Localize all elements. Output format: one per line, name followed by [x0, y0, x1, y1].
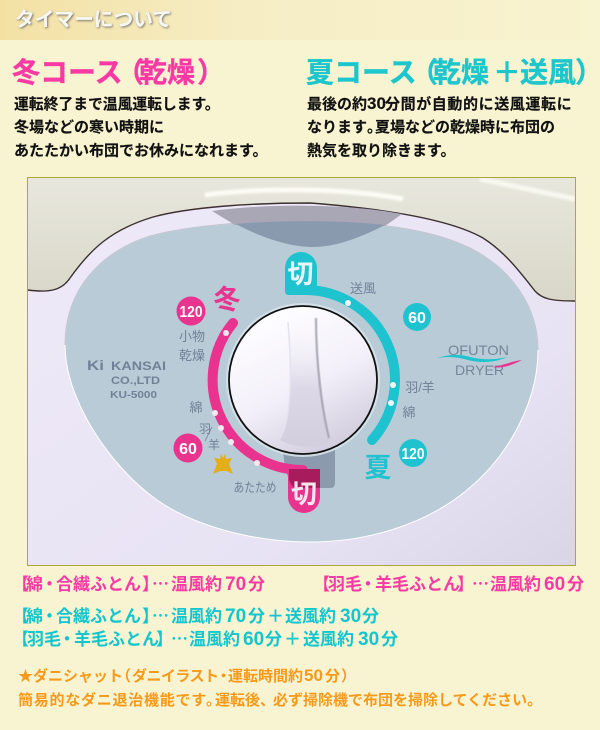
season kanji: summer: 夏: [364, 453, 392, 483]
dial labels: 綿: [402, 405, 416, 420]
winter course times: 】: [142, 575, 159, 594]
dial labels: [179, 281, 435, 495]
badge: pink 60: [174, 434, 202, 462]
badge: cyan 120: [399, 439, 427, 467]
summer course times: ⋯: [152, 607, 169, 626]
winter course text: 運転終了まで温風運転します。: [14, 95, 220, 113]
icon: mite: [213, 454, 233, 474]
winter course times: [12, 574, 584, 595]
heading: winter course: 冬コース: [12, 57, 123, 88]
summer course times: 温風約: [171, 607, 222, 626]
winter course times: 温風約: [171, 575, 222, 594]
beige upper housing: [28, 178, 575, 301]
winter course times: 【: [12, 575, 29, 594]
dial labels: 送風: [350, 281, 376, 296]
winter course times: 70: [225, 574, 246, 595]
summer course times: ＋: [267, 607, 284, 626]
summer course times: 60: [243, 629, 264, 650]
season kanji: winter: 冬: [214, 285, 240, 315]
summer course text: 最後の約: [307, 95, 367, 113]
summer course times: 】: [156, 630, 173, 649]
cyan tab label: 切: [287, 259, 314, 289]
summer course times: 30: [340, 606, 361, 627]
product logo: [437, 342, 522, 378]
winter course times: 60: [544, 574, 565, 595]
dial knob: [226, 303, 380, 457]
summer course times: 30: [358, 629, 379, 650]
mite course note: ダニイラスト: [132, 667, 219, 685]
winter course text: [14, 95, 268, 160]
mite course note: ★: [18, 668, 33, 685]
summer course times: ⋯: [171, 630, 188, 649]
pink winter arc: [212, 323, 320, 513]
winter course times: 羽毛: [328, 575, 362, 594]
summer course times: 分: [265, 630, 282, 649]
winter course times: ・: [360, 575, 376, 594]
summer course times: 送風約: [285, 607, 336, 626]
summer course times: 送風約: [303, 630, 354, 649]
summer course text: 分間が自動的に送風運転に: [385, 95, 572, 113]
winter course times: ⋯: [472, 575, 489, 594]
badge: pink 120: [176, 296, 206, 326]
summer course text: [307, 94, 572, 160]
dial labels: あたため: [234, 480, 276, 495]
badge: pink 120: 120: [180, 304, 203, 321]
tab shaded part: [289, 469, 320, 488]
product logo: OFUTON: [448, 342, 509, 358]
winter course times: 温風約: [490, 575, 541, 594]
winter course times: 羊毛ふとん: [375, 574, 460, 594]
product logo: DRYER: [455, 362, 504, 378]
panel: summer course description: [306, 57, 600, 160]
summer course times: 分: [248, 607, 265, 626]
dial labels: 綿: [189, 400, 203, 415]
grey oval control plate: [65, 221, 538, 542]
heading: summer course: 送風: [520, 57, 576, 88]
dial labels: 小物: [179, 329, 205, 344]
summer course times: 【: [12, 607, 29, 626]
winter course text: 冬場などの寒い時期に: [14, 118, 164, 136]
heading: summer course: ＋: [493, 57, 521, 88]
winter course times: 【: [313, 575, 330, 594]
mite course note: ダニシャット: [33, 667, 123, 685]
shadow below knob: [283, 445, 335, 488]
summer course times: 羊毛ふとん: [74, 629, 159, 649]
cyan dial dots: [345, 300, 396, 406]
maker logo: [87, 357, 166, 401]
mite course note: 必ず掃除機で布団を掃除してください。: [273, 691, 542, 709]
pink off tab: [288, 470, 320, 513]
mite course note: 運転後、: [215, 691, 275, 709]
heading: summer course: 乾燥: [433, 57, 489, 88]
summer course times: ＋: [284, 630, 301, 649]
mite course note: ）: [341, 668, 356, 685]
maker logo: KU-5000: [110, 389, 157, 401]
mite course note: [18, 666, 542, 709]
header band: [0, 0, 600, 40]
heading: winter course: ）: [197, 57, 225, 88]
heading: summer course: （: [410, 57, 438, 88]
mite course note: 。: [206, 692, 221, 709]
summer course text: 30: [367, 94, 386, 113]
mite course note: 運転時間約: [228, 667, 303, 685]
winter course times: 分: [248, 575, 265, 594]
maker logo: CO.,LTD: [111, 375, 160, 387]
winter course text: あたたかい布団でお休みになれます。: [14, 142, 268, 160]
badge: cyan 60: [403, 303, 431, 331]
summer course times: 分: [362, 607, 379, 626]
maker logo: KANSAI: [111, 359, 166, 373]
heading: winter course: （: [116, 57, 144, 88]
mite course note: ・: [216, 668, 231, 685]
summer course times: 合繊ふとん: [56, 607, 141, 626]
summer course times: ・: [41, 607, 58, 626]
badge: pink 60: 60: [179, 441, 197, 458]
summer course times: [12, 606, 398, 650]
summer course times: 】: [142, 607, 159, 626]
photo frame: [28, 178, 576, 566]
winter course times: 】: [457, 575, 474, 594]
summer course times: ・: [58, 630, 76, 649]
winter course times: 綿: [26, 575, 43, 594]
mite course note: 簡易的なダニ退治機能です: [18, 691, 207, 709]
summer course text: 熱気を取り除きます。: [307, 142, 456, 160]
heading: summer course: 夏コース: [306, 57, 417, 88]
heading: winter course: 乾燥: [139, 57, 195, 88]
winter course times: ⋯: [152, 575, 169, 594]
badge: cyan 60: 60: [408, 310, 426, 327]
summer course times: 70: [225, 606, 246, 627]
summer course text: なります: [307, 119, 367, 136]
summer course times: 【: [12, 630, 29, 649]
summer course times: 綿: [26, 607, 43, 626]
summer course text: 夏場などの乾燥時に布団の: [375, 118, 555, 136]
dial labels: 羊: [208, 437, 220, 452]
dial labels: 羽: [199, 422, 211, 436]
number badges: [174, 296, 431, 467]
finger notch at top of plate: [212, 206, 402, 247]
photo: timer control panel: [28, 178, 576, 566]
winter course times: 分: [567, 575, 584, 594]
maker logo: Ki: [87, 357, 104, 373]
summer course times: 温風約: [189, 630, 240, 649]
cyan summer arc: [285, 252, 396, 440]
summer course times: 羽毛: [27, 630, 61, 649]
panel: winter course description: [12, 57, 268, 160]
pink dial dots: [212, 330, 260, 466]
mite course note: 50: [304, 666, 323, 685]
winter course times: 合繊ふとん: [56, 575, 141, 594]
section title: タイマーについて: [15, 8, 172, 31]
mite course note: 分: [325, 668, 340, 685]
winter course times: ・: [41, 575, 58, 594]
dial labels: 乾燥: [179, 348, 205, 363]
appliance body: [28, 178, 576, 565]
pink tab label: 切: [291, 479, 317, 509]
cyan off tab: [285, 252, 317, 295]
summer course times: 分: [381, 630, 398, 649]
summer course text: 。: [367, 119, 382, 136]
mite course note: （: [116, 668, 131, 685]
dial labels: 羽/羊: [405, 380, 435, 395]
badge: cyan 120: 120: [402, 446, 425, 463]
